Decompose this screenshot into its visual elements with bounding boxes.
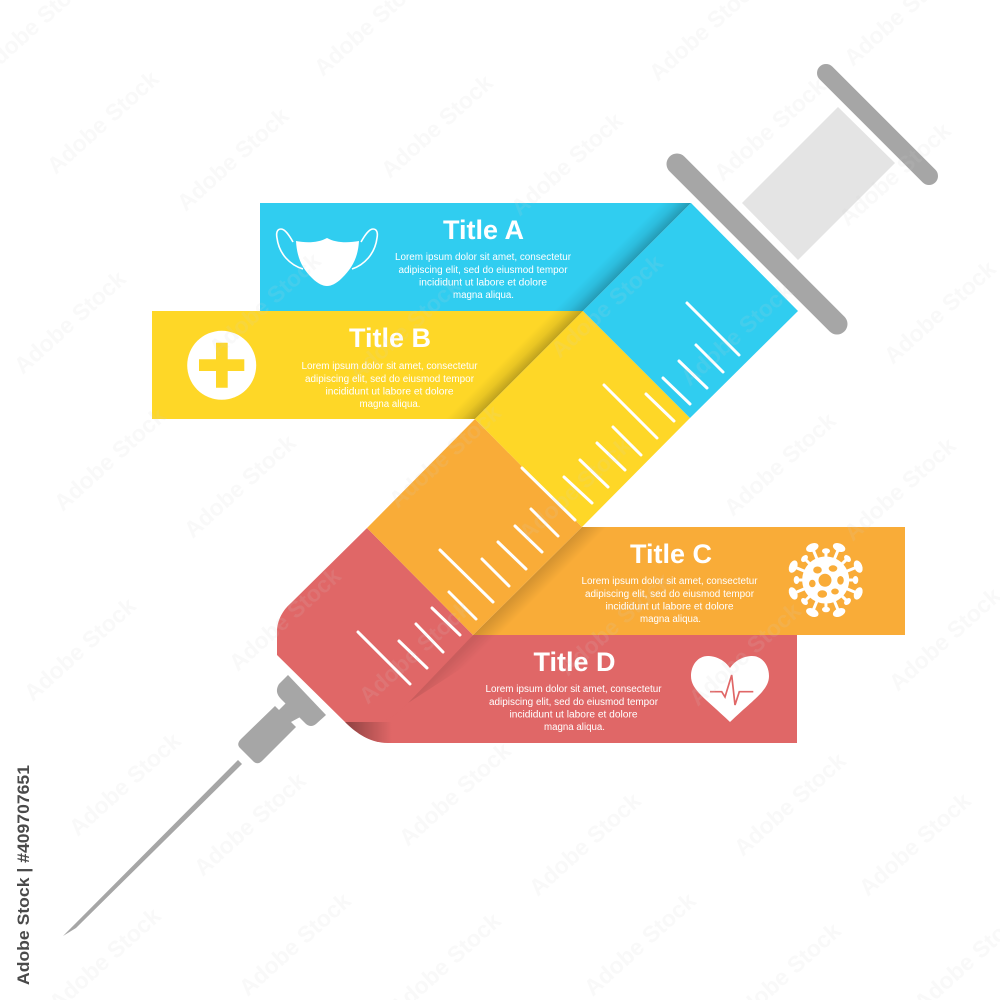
barrel segment: blue [583, 203, 798, 418]
watermark pattern: Adobe Stock [514, 432, 636, 546]
watermark pattern: Adobe Stock [224, 562, 346, 676]
text: Title D [486, 647, 662, 733]
watermark pattern: Adobe Stock [234, 887, 356, 1000]
barrel segment: orange [367, 419, 582, 635]
icon: virus [787, 541, 864, 619]
text: Title A: Title A [443, 215, 524, 245]
watermark pattern: Adobe Stock [719, 407, 841, 521]
watermark pattern: Adobe Stock [709, 72, 831, 186]
watermark pattern: Adobe Stock [64, 727, 186, 841]
text: Title D: incididunt ut labore et dolore [510, 710, 638, 720]
watermark pattern: Adobe Stock [524, 787, 646, 901]
text: Title C [582, 539, 758, 625]
text: Title C: Title C [630, 539, 712, 569]
barrel segment: red [277, 528, 473, 722]
text: Title D: Lorem ipsum dolor sit amet, consectetur [486, 684, 662, 695]
text: Title A [395, 215, 572, 301]
watermark pattern: Adobe Stock [344, 272, 466, 386]
needle [63, 760, 242, 936]
watermark pattern: Adobe Stock [49, 402, 171, 516]
text: Title C: incididunt ut labore et dolore [606, 602, 734, 612]
band: Title D background [345, 635, 797, 743]
needle hub [238, 701, 302, 763]
text: Title A: incididunt ut labore et dolore [419, 278, 547, 288]
measurement ticks [358, 303, 739, 684]
watermark pattern: Adobe Stock [554, 567, 676, 681]
text: Title B [302, 323, 478, 410]
text: Title A: adipiscing elit, sed do eiusmod tempor [398, 265, 568, 276]
plunger rod [742, 107, 895, 260]
watermark pattern: Adobe Stock [394, 737, 516, 851]
watermark pattern: Adobe Stock [579, 887, 701, 1000]
barrel flange [677, 164, 837, 324]
text: Title B: magna aliqua. [360, 399, 420, 410]
watermark pattern: Adobe Stock [834, 117, 956, 231]
watermark pattern: Adobe Stock [839, 432, 961, 546]
watermark pattern: Adobe Stock [354, 595, 476, 709]
needle collar [277, 675, 326, 726]
text: Title C: magna aliqua. [640, 614, 701, 625]
watermark pattern: Adobe Stock [546, 249, 668, 363]
text: Title C: adipiscing elit, sed do eiusmod tempor [585, 589, 755, 600]
band: Title B background [152, 311, 583, 419]
barrel segment: yellow [475, 311, 690, 527]
watermark pattern: Adobe Stock [42, 65, 164, 179]
watermark pattern: Adobe Stock [384, 399, 506, 513]
text: Title D: magna aliqua. [544, 722, 605, 733]
watermark pattern: Adobe Stock [729, 747, 851, 861]
band: Title A background [260, 203, 691, 311]
syringe barrel [277, 203, 798, 722]
icon: heart with pulse [691, 656, 769, 722]
stock id caption: Adobe Stock | #409707651 [14, 765, 33, 985]
watermark pattern: Adobe Stock [506, 107, 628, 221]
icon: face mask [277, 229, 377, 286]
text: Title D: adipiscing elit, sed do eiusmod tempor [489, 697, 659, 708]
text: Title D: Title D [533, 647, 616, 677]
band: Title C background [473, 527, 905, 635]
text: Title B: Lorem ipsum dolor sit amet, consectetur [302, 361, 478, 372]
watermark pattern: Adobe Stock [684, 597, 806, 711]
watermark pattern: Adobe Stock [179, 429, 301, 543]
text: Title B: incididunt ut labore et dolore [326, 386, 454, 398]
watermark pattern: Adobe Stock [172, 102, 294, 216]
text: Title A: Lorem ipsum dolor sit amet, consectetur [395, 252, 572, 263]
text: Title B: adipiscing elit, sed do eiusmod tempor [305, 374, 475, 385]
watermark pattern: Adobe Stock [9, 265, 131, 379]
watermark pattern: Adobe Stock [854, 787, 976, 901]
shadows beside the barrel [345, 203, 691, 743]
watermark pattern: Adobe Stock [19, 592, 141, 706]
plunger thumb rest [826, 73, 929, 176]
watermark pattern: Adobe Stock [879, 255, 1000, 369]
icon: medical cross [187, 331, 256, 400]
watermark pattern: Adobe Stock [204, 247, 326, 361]
text: Title A: magna aliqua. [453, 290, 514, 301]
text: Title B: Title B [349, 323, 431, 353]
watermark pattern: Adobe Stock [189, 767, 311, 881]
watermark pattern: Adobe Stock [676, 277, 798, 391]
watermark pattern: Adobe Stock [376, 69, 498, 183]
text: Title C: Lorem ipsum dolor sit amet, consectetur [582, 576, 758, 587]
